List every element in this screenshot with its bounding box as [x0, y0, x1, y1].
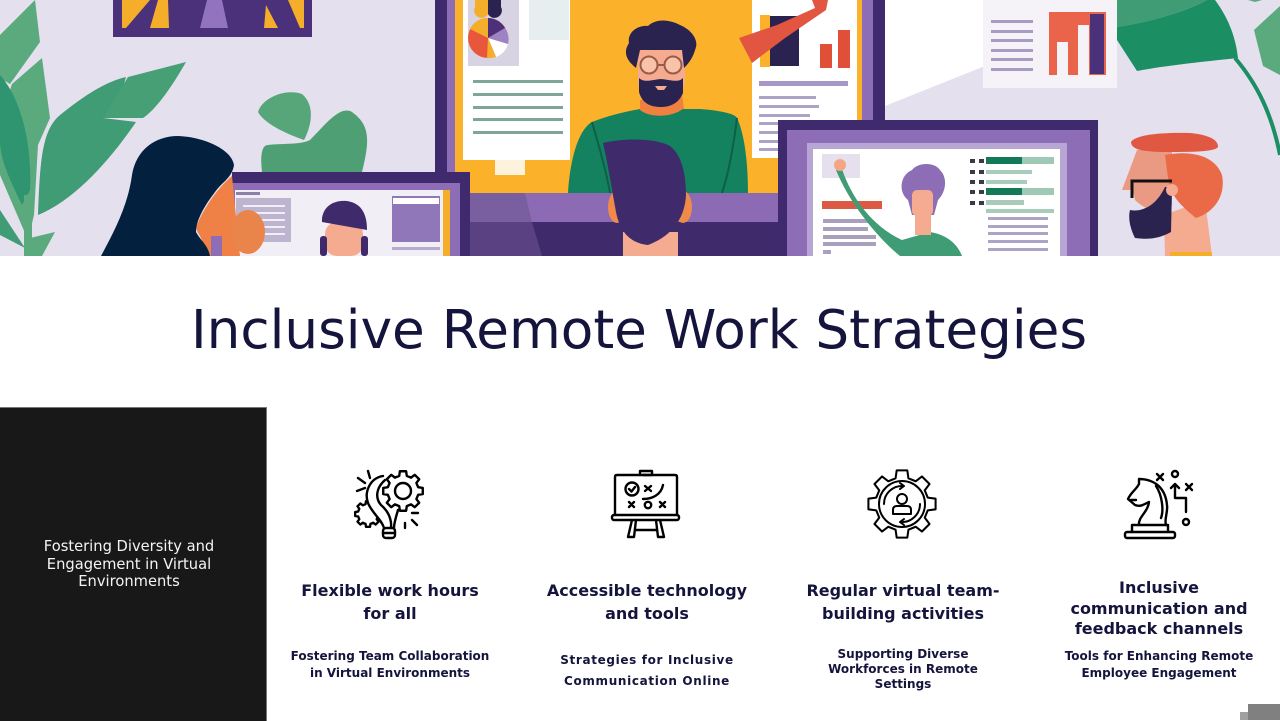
woman with dark hair — [101, 136, 265, 256]
viewer back of head — [603, 140, 692, 256]
right plant — [1117, 0, 1280, 155]
hero illustration: remote video call — [0, 0, 1280, 256]
column 1 subtext: in Virtual Environments — [310, 666, 470, 680]
column 3 heading — [806, 581, 1000, 623]
column 1 heading: for all — [363, 604, 417, 623]
column 4 heading: communication and — [1070, 599, 1248, 618]
column 4 heading — [1070, 578, 1248, 638]
left monitor — [232, 172, 470, 256]
column 3 subtext: Workforces in Remote — [828, 662, 978, 676]
column 2 heading: Accessible technology — [547, 581, 747, 600]
icon: lightbulb with gears — [354, 470, 424, 540]
sidebar text: Fostering Diversity and — [44, 538, 214, 555]
corner mark — [1240, 704, 1280, 720]
column 4 heading: Inclusive — [1119, 578, 1199, 597]
central screen frame — [435, 0, 885, 256]
wall art poster — [113, 0, 312, 37]
column 3 subtext: Settings — [875, 677, 931, 691]
icon: gear with person — [867, 469, 937, 539]
column 3 subtext: Supporting Diverse — [838, 647, 968, 661]
column 4 subtext: Tools for Enhancing Remote — [1065, 649, 1253, 663]
column 4 heading: feedback channels — [1075, 619, 1243, 638]
column 4 subtext: Employee Engagement — [1081, 666, 1236, 680]
man with red hair — [1122, 133, 1223, 256]
icon: chess knight strategy — [1124, 470, 1194, 540]
column 2 heading — [547, 581, 747, 623]
sidebar text: Environments — [78, 573, 180, 590]
column 1 subtext: Fostering Team Collaboration — [291, 649, 489, 663]
left plant — [0, 0, 186, 256]
column 1 heading — [301, 581, 479, 623]
column 4 subtext — [1064, 649, 1253, 680]
window and white wall on the right — [885, 0, 1117, 106]
column 1 heading: Flexible work hours — [301, 581, 479, 600]
icon: strategy board — [610, 470, 680, 538]
column 1 subtext — [291, 649, 489, 680]
column 2 subtext — [560, 653, 734, 688]
column 2 heading: and tools — [605, 604, 689, 623]
central man with glasses — [568, 21, 748, 193]
column 3 subtext — [828, 647, 978, 691]
right monitor — [778, 120, 1098, 256]
panel: dark sidebar — [0, 407, 267, 721]
right document with bar chart — [739, 0, 857, 158]
title: Inclusive Remote Work Strategies — [191, 299, 1087, 361]
column 2 subtext: Strategies for Inclusive — [560, 653, 734, 667]
column 3 heading: Regular virtual team- — [806, 581, 1000, 600]
column 3 heading: building activities — [822, 604, 984, 623]
sidebar text — [44, 538, 214, 590]
column 2 subtext: Communication Online — [564, 674, 730, 688]
left document with pie chart — [463, 0, 570, 175]
small plant behind monitor — [258, 92, 367, 172]
sidebar text: Engagement in Virtual — [47, 556, 211, 573]
